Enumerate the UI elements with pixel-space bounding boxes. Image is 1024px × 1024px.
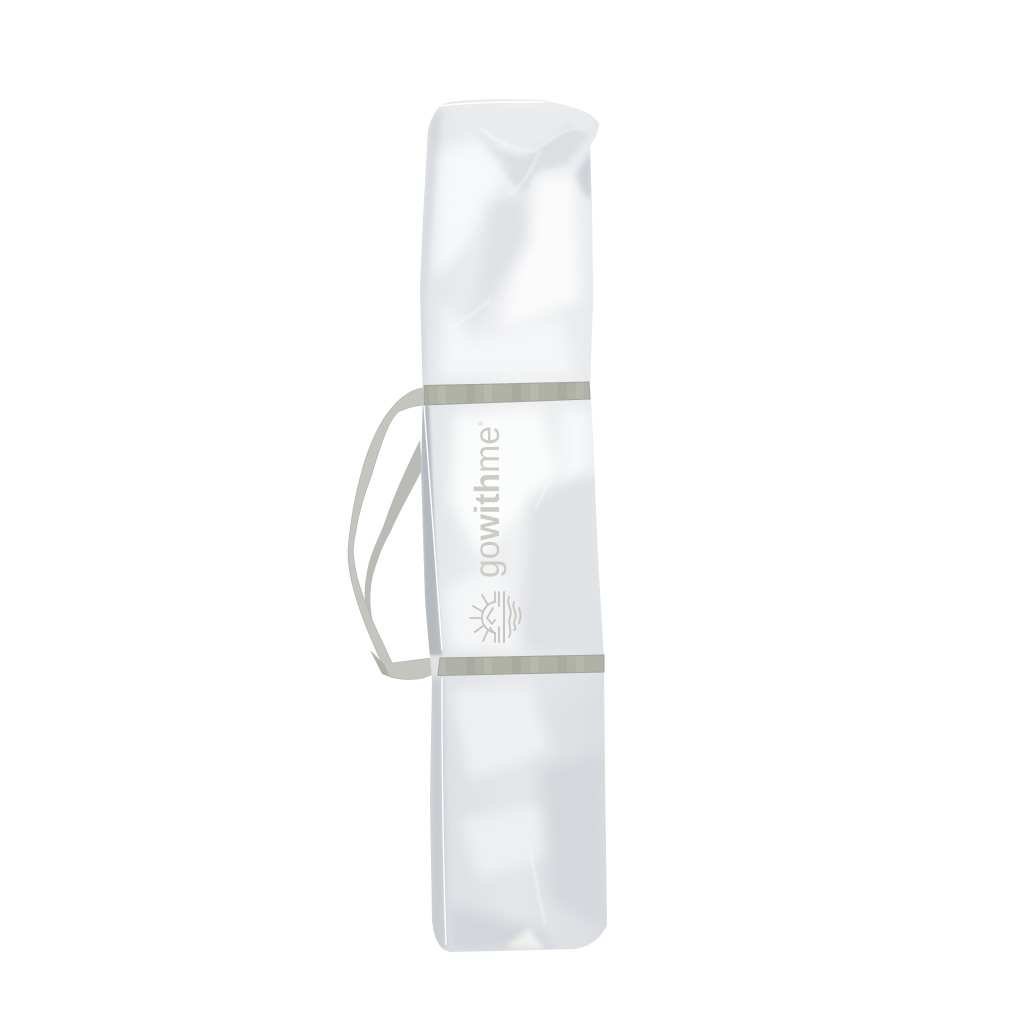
- bag body: [420, 99, 607, 952]
- wordmark: gowithme: ®: [478, 421, 485, 426]
- handle: rear strap: [365, 440, 422, 622]
- product: carry bag: [348, 90, 620, 960]
- logo icon: sun, mountain and waves: [470, 592, 520, 642]
- top hem: [440, 102, 545, 106]
- handle: front strap: [348, 388, 440, 679]
- fabric shading: [421, 112, 592, 952]
- wordmark: gowithme: gowithme: [468, 426, 507, 578]
- strap: lower band: [438, 655, 604, 676]
- handle: lower twist: [370, 650, 390, 677]
- strap: upper band: [424, 382, 590, 405]
- seam: [424, 405, 446, 945]
- creases: [518, 128, 576, 924]
